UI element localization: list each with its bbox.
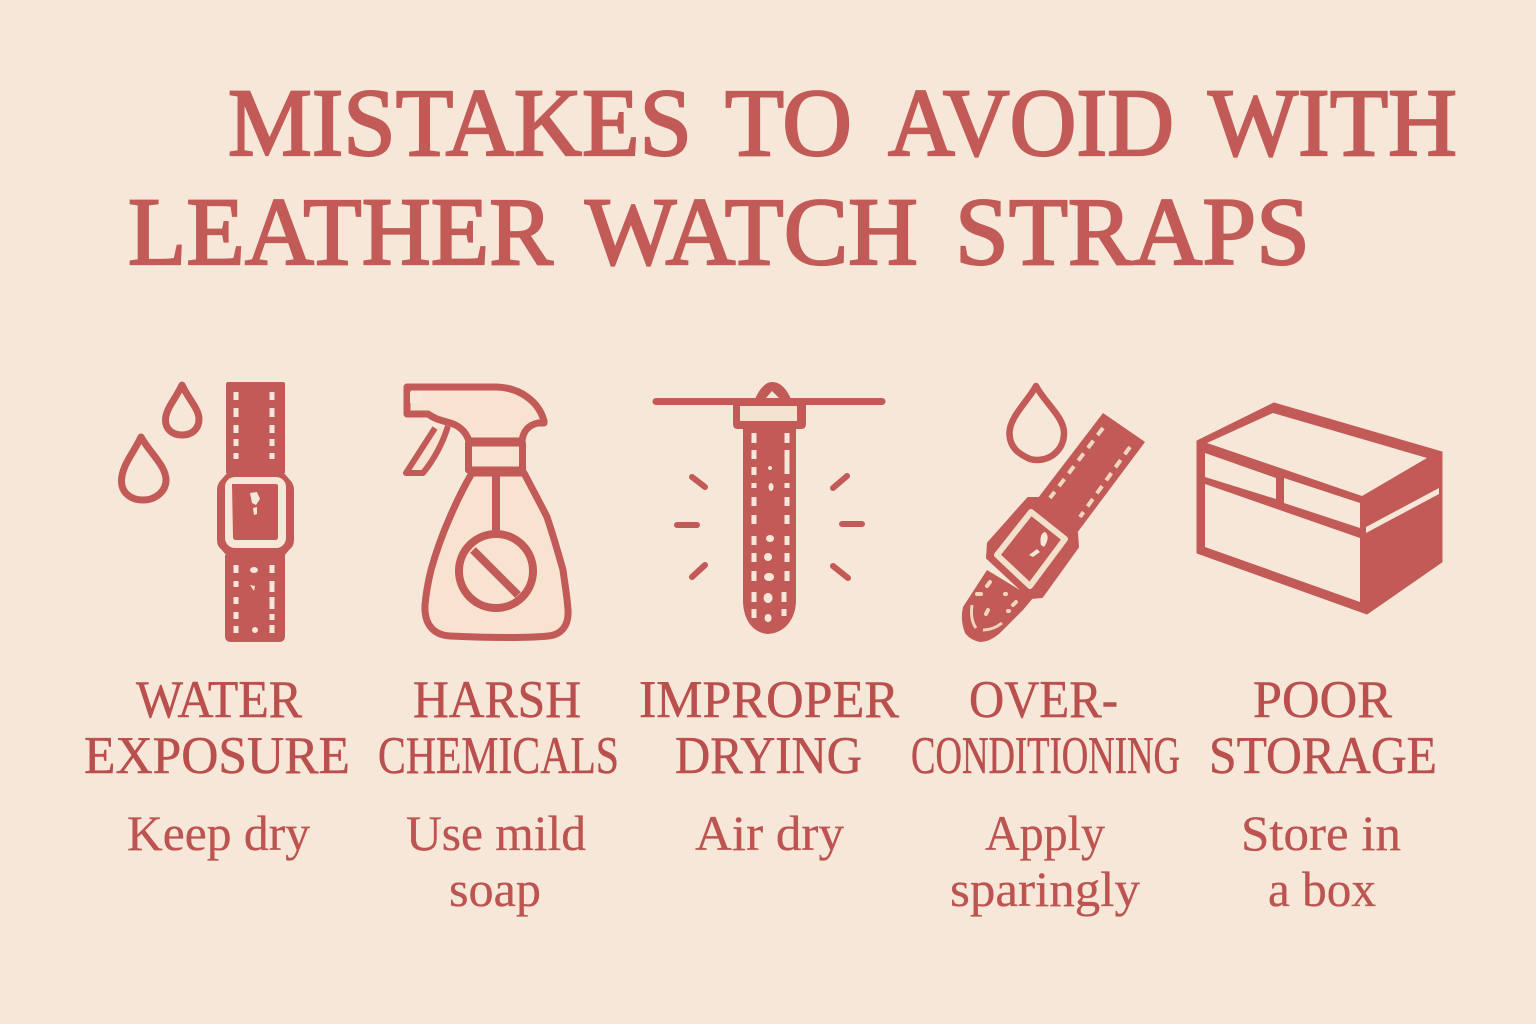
icon: storage box [1197, 403, 1442, 614]
label: over-conditioning: Apply [985, 805, 1105, 861]
label: improper drying [639, 671, 900, 861]
title: TO [725, 69, 852, 176]
label: over-conditioning: OVER- [969, 671, 1118, 729]
icon: strap hanging to dry [656, 382, 882, 634]
icon: spray bottle [406, 387, 568, 638]
title: WATCH [585, 178, 918, 285]
label: over-conditioning: sparingly [950, 861, 1140, 917]
label: poor storage: STORAGE [1209, 727, 1437, 785]
label: harsh chemicals [378, 671, 619, 917]
title: AVOID [888, 69, 1174, 176]
label: harsh chemicals: HARSH [413, 671, 581, 729]
label: harsh chemicals: CHEMICALS [378, 727, 619, 785]
title: STRAPS [955, 178, 1310, 285]
label: water exposure: EXPOSURE [84, 727, 350, 785]
label: improper drying: DRYING [675, 727, 862, 785]
label: poor storage [1209, 671, 1437, 917]
label: over-conditioning [911, 671, 1180, 917]
title [128, 69, 1457, 285]
label: water exposure: WATER [136, 671, 303, 729]
title: WITH [1208, 69, 1457, 176]
title: LEATHER [128, 178, 553, 285]
label: water exposure [84, 671, 350, 861]
label: improper drying: Air dry [695, 805, 844, 861]
label: poor storage: Store in [1241, 805, 1401, 861]
label: poor storage: a box [1268, 861, 1376, 917]
label: harsh chemicals: soap [449, 861, 541, 917]
icon: drop and strap with watch [962, 386, 1145, 642]
label: water exposure: Keep dry [127, 805, 310, 861]
label: over-conditioning: CONDITIONING [911, 727, 1180, 785]
icon: water drops and watch [122, 382, 294, 642]
label: harsh chemicals: Use mild [406, 805, 586, 861]
label: improper drying: IMPROPER [639, 671, 900, 729]
label: poor storage: POOR [1253, 671, 1393, 729]
title: MISTAKES [228, 69, 692, 176]
